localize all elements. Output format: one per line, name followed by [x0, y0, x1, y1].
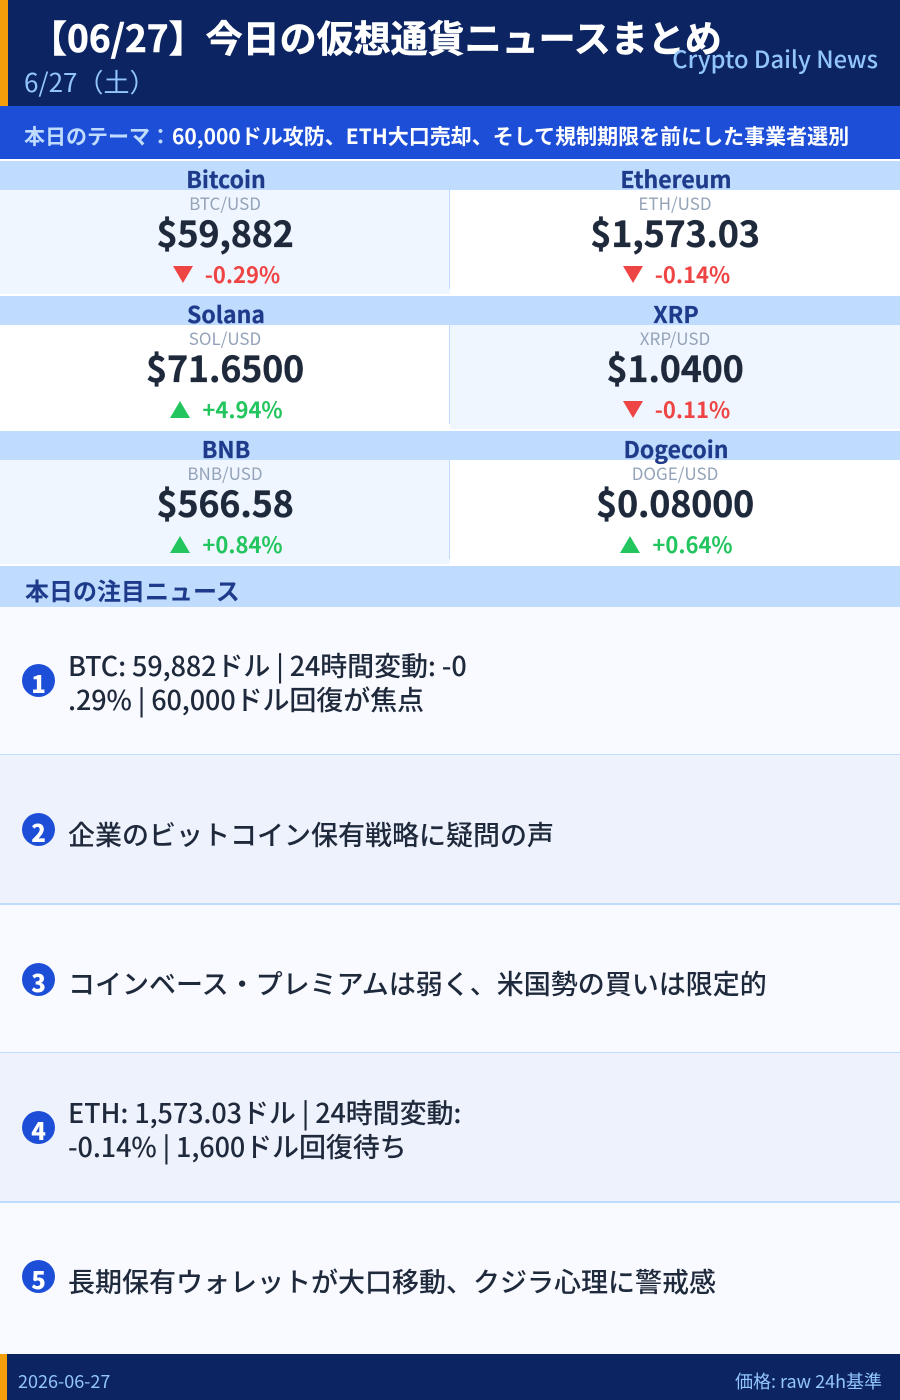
header band — [0, 0, 900, 106]
accent bar — [0, 0, 8, 106]
news item 1: .29% | 60,000ドル回復が焦点 — [68, 679, 424, 718]
price card: Solana: +4.94% — [202, 393, 283, 425]
brand label: Crypto Daily News — [672, 41, 878, 75]
price card: BNB — [0, 431, 450, 564]
price card: Ethereum: ETH/USD — [638, 190, 712, 215]
news item 4: -0.14% | 1,600ドル回復待ち — [68, 1126, 407, 1165]
price card: Solana: SOL/USD — [189, 325, 261, 350]
price card: Bitcoin: BTC/USD — [189, 190, 261, 215]
price card: Dogecoin: DOGE/USD — [632, 460, 718, 485]
title: 【06/27】今日の仮想通貨ニュースまとめ — [30, 9, 722, 63]
theme banner: 本日のテーマ： — [24, 121, 171, 151]
news item 2: 企業のビットコイン保有戦略に疑問の声 — [68, 814, 554, 853]
news item 4: 4 — [31, 1112, 46, 1147]
price card: Solana: $71.6500 — [146, 341, 304, 393]
news item 4: ETH: 1,573.03ドル | 24時間変動: — [68, 1092, 461, 1131]
news item 1: 1 — [31, 665, 46, 700]
price card: Dogecoin — [450, 431, 900, 560]
news item 2: 2 — [31, 814, 46, 849]
price card: Ethereum: $1,573.03 — [590, 206, 760, 258]
price card: Solana — [0, 296, 450, 425]
footer date: 2026-06-27 — [18, 1368, 110, 1394]
price card: BNB: +0.84% — [202, 528, 283, 560]
news item 3: 3 — [31, 964, 46, 999]
news item 5: 5 — [31, 1261, 46, 1296]
price card: BNB: $566.58 — [156, 476, 294, 528]
price card: Bitcoin: -0.29% — [205, 258, 280, 290]
price card: Ethereum: -0.14% — [655, 258, 730, 290]
price card: Dogecoin: Dogecoin — [623, 431, 729, 465]
price card: Dogecoin: +0.64% — [652, 528, 733, 560]
price card: Ethereum: Ethereum — [620, 161, 732, 195]
price card: Bitcoin — [0, 161, 450, 294]
news item 5: 長期保有ウォレットが大口移動、クジラ心理に警戒感 — [68, 1261, 716, 1300]
news section heading: 本日の注目ニュース — [25, 572, 240, 607]
price card: XRP: -0.11% — [655, 393, 730, 425]
footer accent — [0, 1354, 7, 1400]
price card: XRP — [450, 296, 900, 429]
price card: XRP: $1.0400 — [606, 341, 744, 393]
news item 1 — [0, 607, 900, 755]
news item 2 — [0, 755, 900, 905]
price card: Ethereum — [450, 161, 900, 290]
news item 3: コインベース・プレミアムは弱く、米国勢の買いは限定的 — [68, 963, 767, 1002]
price card: Dogecoin: $0.08000 — [596, 476, 754, 528]
news item 4 — [0, 1053, 900, 1203]
news item 1: BTC: 59,882ドル | 24時間変動: -0 — [68, 645, 467, 684]
price card: BNB: BNB/USD — [187, 460, 263, 485]
price card: XRP: XRP/USD — [640, 325, 710, 350]
date: 6/27（土） — [24, 63, 155, 100]
price card: Solana: Solana — [187, 296, 265, 330]
news item 3 — [0, 905, 900, 1053]
price card: Bitcoin: $59,882 — [156, 206, 294, 258]
price card: XRP: XRP — [653, 296, 699, 330]
news section heading — [0, 566, 900, 607]
theme banner: 60,000ドル攻防、ETH大口売却、そして規制期限を前にした事業者選別 — [172, 121, 849, 151]
theme banner — [0, 106, 900, 159]
news item 5 — [0, 1203, 900, 1354]
price card: Bitcoin: Bitcoin — [186, 161, 266, 195]
footer note: 価格: raw 24h基準 — [735, 1368, 882, 1394]
footer — [0, 1354, 900, 1400]
price card: BNB: BNB — [202, 431, 250, 465]
